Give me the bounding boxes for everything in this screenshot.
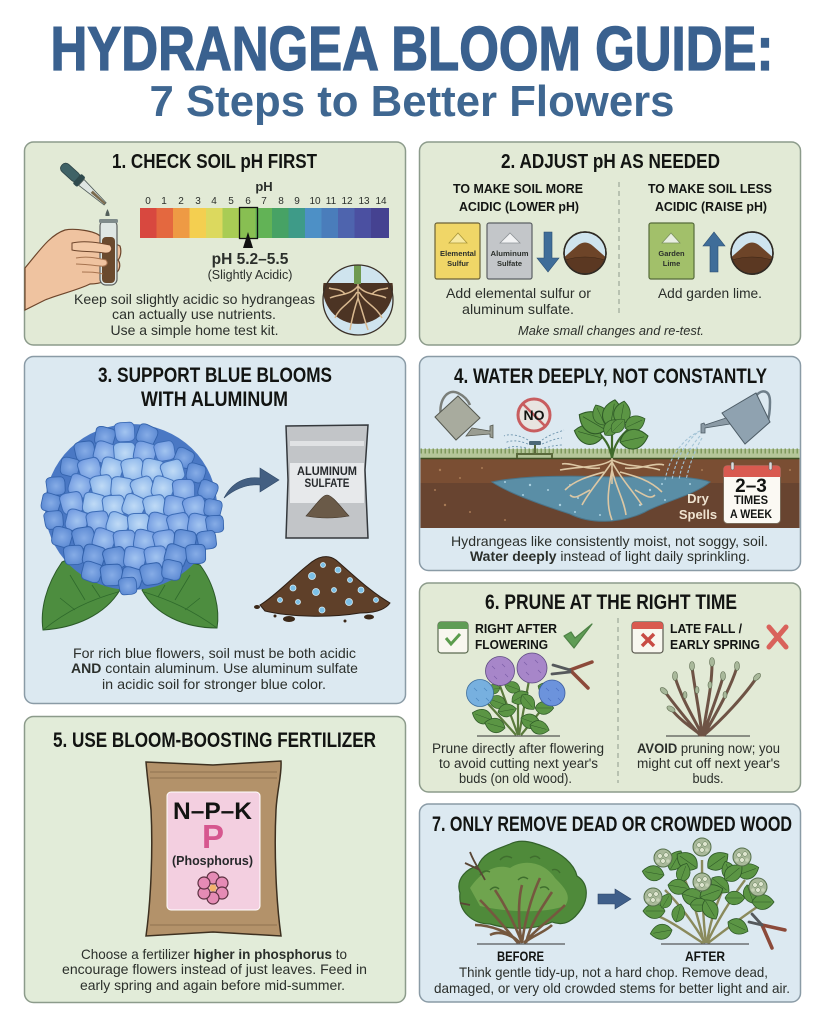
icon: root ball (323, 265, 393, 335)
panel: 7 remove dead wood (420, 804, 800, 1002)
icon: leaves (42, 559, 218, 630)
label: before: BEFORE (497, 949, 544, 964)
right column heading: TO MAKE SOIL LESS (648, 181, 772, 196)
body text 1: can actually use nutrients. (112, 306, 276, 322)
icon: soil (564, 232, 606, 275)
icon: bare shrub (659, 658, 762, 736)
pH scale (140, 179, 389, 248)
pH scale: 10 (309, 196, 321, 207)
icon: soil right (731, 232, 773, 275)
icon: elemental sulfur bag: Sulfur (447, 259, 469, 268)
left text: Add elemental sulfur or (446, 285, 591, 301)
icon: garden lime bag: Garden (658, 249, 685, 258)
icon: green calendar (438, 622, 468, 653)
panel: 2 adjust pH (420, 142, 800, 345)
icon: flower (198, 872, 228, 904)
body text 1 (74, 291, 315, 338)
icon: red calendar (632, 622, 663, 653)
icon: garden lime bag: Lime (663, 259, 680, 268)
pH scale: 7 (261, 196, 267, 207)
right column heading (648, 181, 772, 214)
pH target: pH 5.2–5.5 (212, 251, 289, 268)
body text 4: Water deeply instead of light daily sprinkling. (470, 548, 750, 564)
icon: calendar (724, 462, 780, 524)
body text 4 (451, 533, 768, 564)
icon: blue hydrangea (40, 421, 225, 596)
body text 3: AND contain aluminum. Use aluminum sulfate (71, 660, 358, 676)
panel: 1 check soil pH (24, 142, 406, 345)
pH scale: 5 (228, 196, 234, 207)
icon: down arrow (537, 232, 559, 272)
right column heading: ACIDIC (RAISE pH) (655, 199, 767, 214)
icon: fertilizer bag (146, 761, 281, 936)
icon: aluminum sulfate bag: ALUMINUM (297, 464, 357, 478)
icon: elemental sulfur bag: Elemental (440, 249, 476, 258)
right text (637, 741, 780, 786)
icon: drop (105, 209, 110, 216)
body text 7: Think gentle tidy-up, not a hard chop. Remove dead, (459, 964, 768, 980)
icon: fertilizer bag: N–P–K (173, 798, 253, 825)
icon: aluminum sulfate bag (487, 223, 532, 279)
label: right after flowering: FLOWERING (475, 637, 548, 652)
pH scale: 4 (211, 196, 217, 207)
body text 7 (434, 964, 790, 996)
icon: green check (564, 624, 592, 648)
heading 6: 6. PRUNE AT THE RIGHT TIME (485, 591, 737, 614)
left column heading: TO MAKE SOIL MORE (453, 181, 583, 196)
label: right after flowering (475, 621, 558, 652)
heading 5: 5. USE BLOOM-BOOSTING FERTILIZER (53, 729, 376, 752)
icon: aluminum sulfate bag (286, 425, 368, 538)
pH scale: 9 (294, 196, 300, 207)
label: late fall (670, 621, 760, 652)
icon: red x (769, 627, 786, 647)
pH scale: 1 (161, 196, 167, 207)
pH scale: 13 (358, 196, 370, 207)
heading 1: 1. CHECK SOIL pH FIRST (112, 151, 317, 173)
icon: aluminum sulfate bag: SULFATE (304, 476, 350, 490)
label: right after flowering: RIGHT AFTER (475, 621, 558, 636)
panel: 5 fertilizer (24, 716, 406, 1002)
note: Make small changes and re-test. (518, 324, 704, 338)
icon: tidy shrub (641, 838, 774, 944)
left text: to avoid cutting next year's (439, 756, 598, 771)
icon: pruners (552, 662, 592, 688)
body text 3: For rich blue flowers, soil must be both acidic (73, 645, 356, 661)
pH scale: pH (255, 179, 273, 194)
pH target: (Slightly Acidic) (208, 268, 292, 282)
pH scale: 2 (178, 196, 184, 207)
body text 4: Hydrangeas like consistently moist, not soggy, soil. (451, 533, 768, 549)
icon: up arrow (703, 232, 725, 272)
label: dry spells: Dry (687, 491, 710, 506)
soil cross-section (420, 449, 800, 528)
body text 7: damaged, or very old crowded stems for better light and air. (434, 980, 790, 996)
panel: 3 blue blooms (24, 356, 406, 704)
pH scale: 3 (195, 196, 201, 207)
icon: aluminum sulfate bag: Sulfate (497, 259, 522, 268)
left text: aluminum sulfate. (462, 301, 574, 317)
label: after: AFTER (685, 949, 725, 964)
right text: buds. (692, 771, 724, 786)
roots (560, 458, 664, 520)
icon: hand with test tube (25, 219, 121, 310)
icon: calendar: 2–3 (735, 476, 767, 497)
icon: flowering shrub (466, 653, 565, 737)
icon: overgrown bush (459, 841, 586, 944)
icon: elemental sulfur bag (435, 223, 480, 279)
icon: garden lime bag (649, 223, 694, 279)
left text: Prune directly after flowering (432, 741, 604, 756)
icon: curved arrow (224, 468, 279, 498)
icon: fertilizer bag: P (202, 818, 224, 855)
body text 3 (71, 645, 358, 692)
icon: fertilizer bag: (Phosphorus) (172, 853, 253, 868)
left column heading (453, 181, 583, 214)
left text (446, 285, 591, 317)
label: late fall: LATE FALL / (670, 621, 742, 636)
icon: aluminum sulfate bag: Aluminum (490, 249, 529, 258)
panel: 4 water deeply (420, 356, 800, 570)
body text 1: Use a simple home test kit. (110, 322, 278, 338)
icon: plant (572, 398, 650, 458)
subtitle: 7 Steps to Better Flowers (150, 77, 674, 126)
pH scale: 6 (245, 196, 251, 207)
left text: buds (on old wood). (459, 771, 572, 786)
icon: soil pile with aluminum (254, 557, 390, 622)
label: dry spells (679, 491, 717, 522)
panel: 6 prune (420, 583, 800, 792)
arrow (598, 889, 631, 909)
icon: right watering can (665, 391, 770, 480)
right text: might cut off next year's (637, 756, 780, 771)
title (50, 15, 774, 126)
left column heading: ACIDIC (LOWER pH) (459, 199, 579, 214)
body text 3: in acidic soil for stronger blue color. (102, 676, 326, 692)
body text 5 (62, 946, 367, 993)
icon: calendar: A WEEK (730, 507, 772, 521)
icon: no sign: NO (524, 407, 545, 423)
body text 5: Choose a fertilizer higher in phosphorus to (81, 946, 347, 962)
icon: no sign (518, 399, 550, 431)
pH scale: 11 (326, 196, 337, 207)
heading 3 (98, 364, 332, 411)
left text (432, 741, 604, 786)
body text 5: early spring and again before mid-summer. (80, 977, 345, 993)
label: dry spells: Spells (679, 507, 717, 522)
pH target (208, 251, 292, 282)
icon: left watering can (435, 392, 493, 440)
right text: AVOID pruning now; you (637, 741, 780, 756)
heading 3: 3. SUPPORT BLUE BLOOMS (98, 364, 332, 387)
icon: pruners (749, 914, 785, 948)
pH scale: 12 (341, 196, 353, 207)
icon: calendar: TIMES (734, 493, 768, 507)
label: late fall: EARLY SPRING (670, 637, 760, 652)
heading 3: WITH ALUMINUM (141, 388, 288, 411)
heading 2: 2. ADJUST pH AS NEEDED (501, 151, 720, 173)
icon: sprinkler (504, 430, 564, 458)
pH scale: 8 (278, 196, 284, 207)
pH scale: 0 (145, 196, 151, 207)
right text: Add garden lime. (658, 285, 762, 301)
icon: dropper (58, 160, 115, 214)
pH scale: 14 (375, 196, 387, 207)
body text 1: Keep soil slightly acidic so hydrangeas (74, 291, 315, 307)
body text 5: encourage flowers instead of just leaves. Feed in (62, 961, 367, 977)
